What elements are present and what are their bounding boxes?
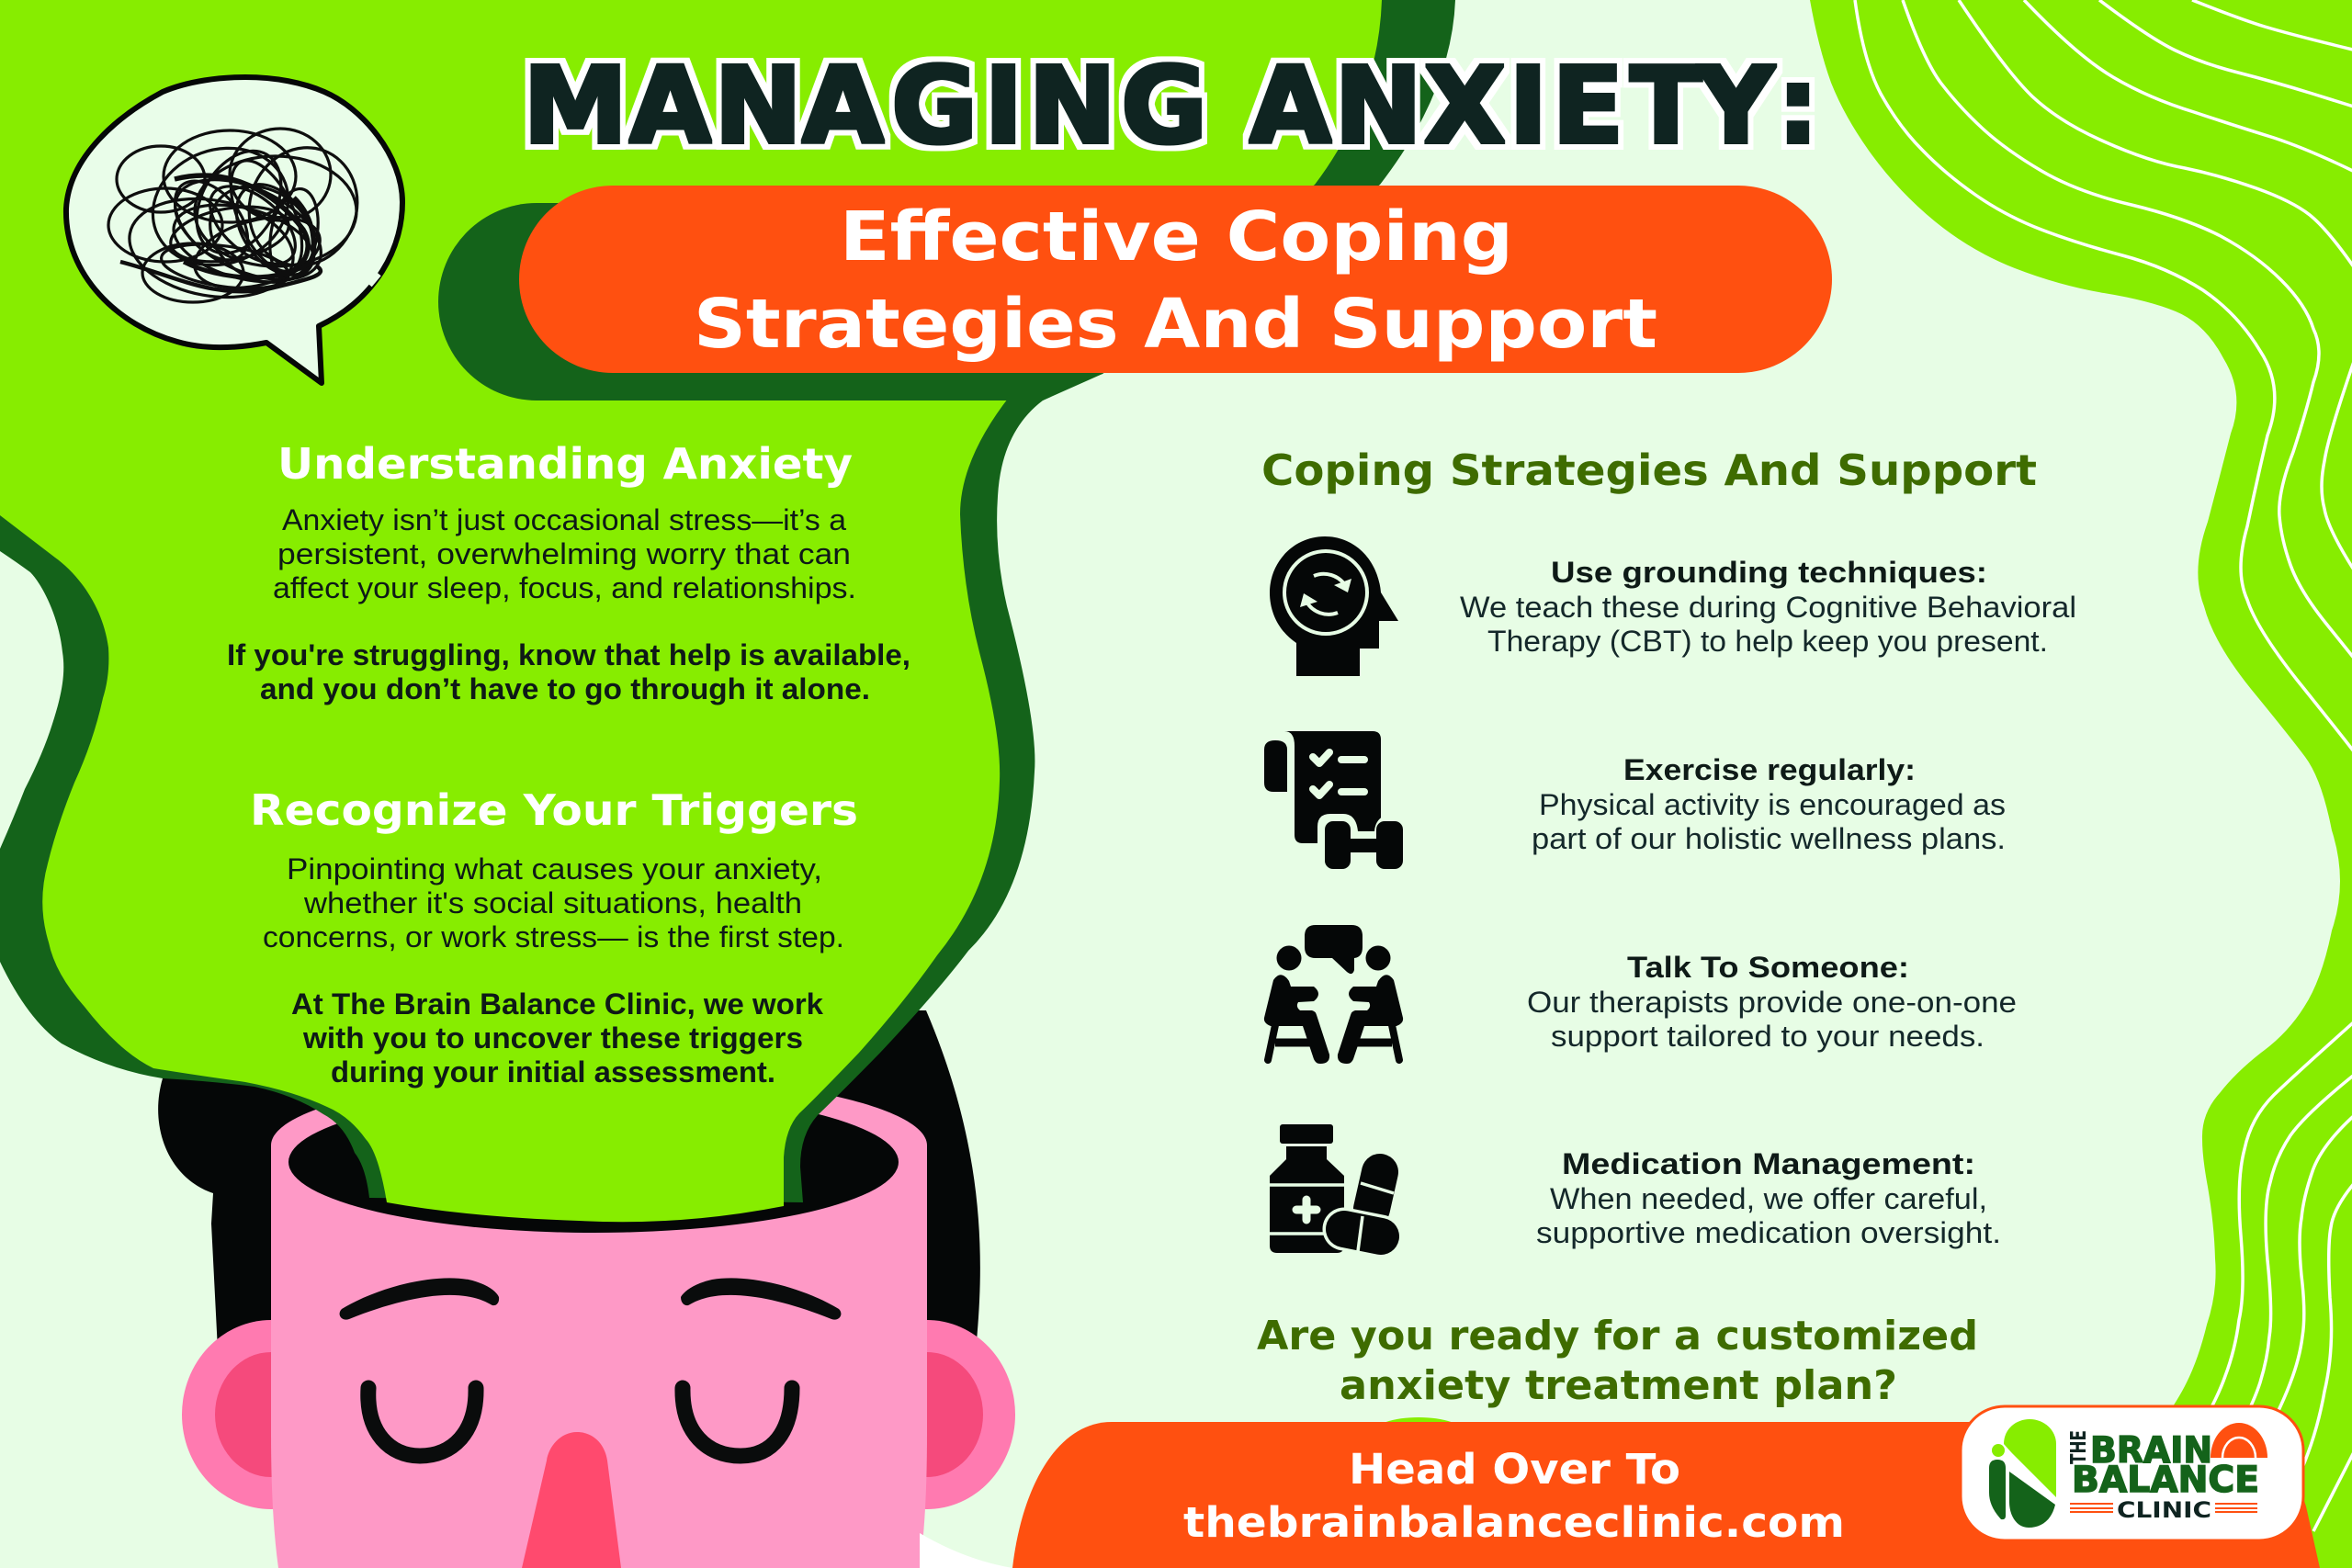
icon: head with rotating arrows [1270, 536, 1398, 676]
text block: Recognize Your Triggers [250, 785, 858, 1089]
footer text: thebrainbalanceclinic.com [1183, 1498, 1845, 1547]
text: Talk To Someone [1527, 951, 2017, 1053]
bold message: during your initial assessment. [331, 1055, 775, 1089]
call to action question: anxiety treatment plan? [1340, 1362, 1897, 1409]
logo card [1961, 1406, 2303, 1540]
icon: medicine bottle and pills [1270, 1124, 1394, 1253]
subtitle text: Effective Coping [840, 197, 1513, 276]
open head cavity [288, 1091, 899, 1233]
body: Anxiety isn’t just occasional stress—it’s a [282, 503, 846, 536]
logo rules [2070, 1504, 2257, 1512]
subtitle text: Strategies And Support [694, 285, 1657, 364]
subtitle pill [519, 186, 1832, 373]
panel: dark green thought shadow [0, 0, 1455, 1202]
text: Exercise regularly [1532, 753, 2006, 855]
footer panel: website banner [1012, 1422, 2320, 1568]
call to action question: Are you ready for a customized [1257, 1313, 1978, 1359]
logo wordmark: CLINIC [2117, 1497, 2211, 1523]
text: Exercise regularly: Physical activity is encouraged as [1539, 788, 2006, 821]
bold message [227, 638, 910, 705]
right ear [839, 1320, 1015, 1509]
left closed eye [368, 1388, 476, 1456]
logo wordmark: BALANCE [2072, 1460, 2259, 1501]
call to action question [1257, 1313, 1978, 1409]
body [263, 852, 844, 953]
hair [158, 1010, 980, 1350]
right closed eye [683, 1388, 792, 1456]
logo arch [2211, 1423, 2267, 1458]
title: MANAGING ANXIETY: [523, 45, 1819, 168]
body: concerns, or work stress— is the first step. [263, 920, 844, 953]
text: Talk To Someone: Talk To Someone: [1627, 951, 1909, 984]
text: Use grounding techniques: We teach these during Cognitive Behavioral [1460, 591, 2076, 624]
text: Talk To Someone: support tailored to your needs. [1551, 1020, 1984, 1053]
bold message: If you're struggling, know that help is available, [227, 638, 910, 671]
nose [522, 1432, 621, 1568]
dark subtitle shadow pill [438, 203, 1332, 400]
body: Pinpointing what causes your anxiety, [287, 852, 822, 886]
logo wordmark: THE [2067, 1430, 2091, 1464]
footer text [1183, 1445, 1845, 1547]
footer text: Head Over To [1349, 1445, 1680, 1494]
text: Medication Management: When needed, we offer careful, [1550, 1182, 1987, 1215]
logo wordmark: BRAIN [2090, 1430, 2212, 1472]
bold message: At The Brain Balance Clinic, we work [291, 987, 823, 1021]
text: Use grounding techniques [1460, 556, 2076, 658]
text: Exercise regularly: part of our holistic wellness plans. [1532, 822, 2006, 855]
text: Talk To Someone: Our therapists provide one-on-one [1527, 986, 2017, 1019]
logo mark [1989, 1419, 2056, 1528]
right eyebrow [681, 1278, 841, 1320]
panel: bright green thought shape [0, 0, 1382, 1222]
green bump behind footer [1373, 1417, 1464, 1449]
text: Medication Management [1536, 1147, 2001, 1249]
body [273, 503, 856, 604]
white corner [920, 1533, 1012, 1568]
text block: Understanding Anxiety [227, 439, 910, 705]
face [271, 1075, 927, 1568]
heading: Coping Strategies And Support: Coping Strategies And Support [1261, 446, 2037, 495]
left eyebrow [340, 1278, 499, 1320]
illustration: head with open top [158, 1010, 1015, 1568]
logo wordmark [2067, 1430, 2259, 1523]
bold message [291, 987, 823, 1089]
decorative wave: top and right [1810, 0, 2352, 1568]
bold message: and you don’t have to go through it alone. [260, 672, 870, 705]
body: whether it's social situations, health [303, 886, 802, 919]
text: Use grounding techniques: Therapy (CBT) to help keep you present. [1487, 625, 2048, 658]
subtitle text [694, 197, 1657, 364]
icon: two people talking [1264, 925, 1403, 1064]
heading: Understanding Anxiety [277, 439, 853, 489]
text: Medication Management: supportive medication oversight. [1536, 1216, 2001, 1249]
text: Exercise regularly: Exercise regularly: [1623, 753, 1916, 786]
text: Medication Management: Medication Management: [1562, 1147, 1975, 1180]
body: persistent, overwhelming worry that can [277, 537, 851, 570]
left ear [182, 1320, 360, 1509]
heading: Recognize Your Triggers [250, 785, 858, 835]
icon: tangled thought speech bubble [66, 77, 402, 383]
text: Use grounding techniques: Use grounding techniques: [1551, 556, 1987, 589]
icon: checklist and dumbbell [1264, 731, 1403, 869]
body: affect your sleep, focus, and relationships. [273, 571, 856, 604]
bold message: with you to uncover these triggers [302, 1021, 803, 1055]
